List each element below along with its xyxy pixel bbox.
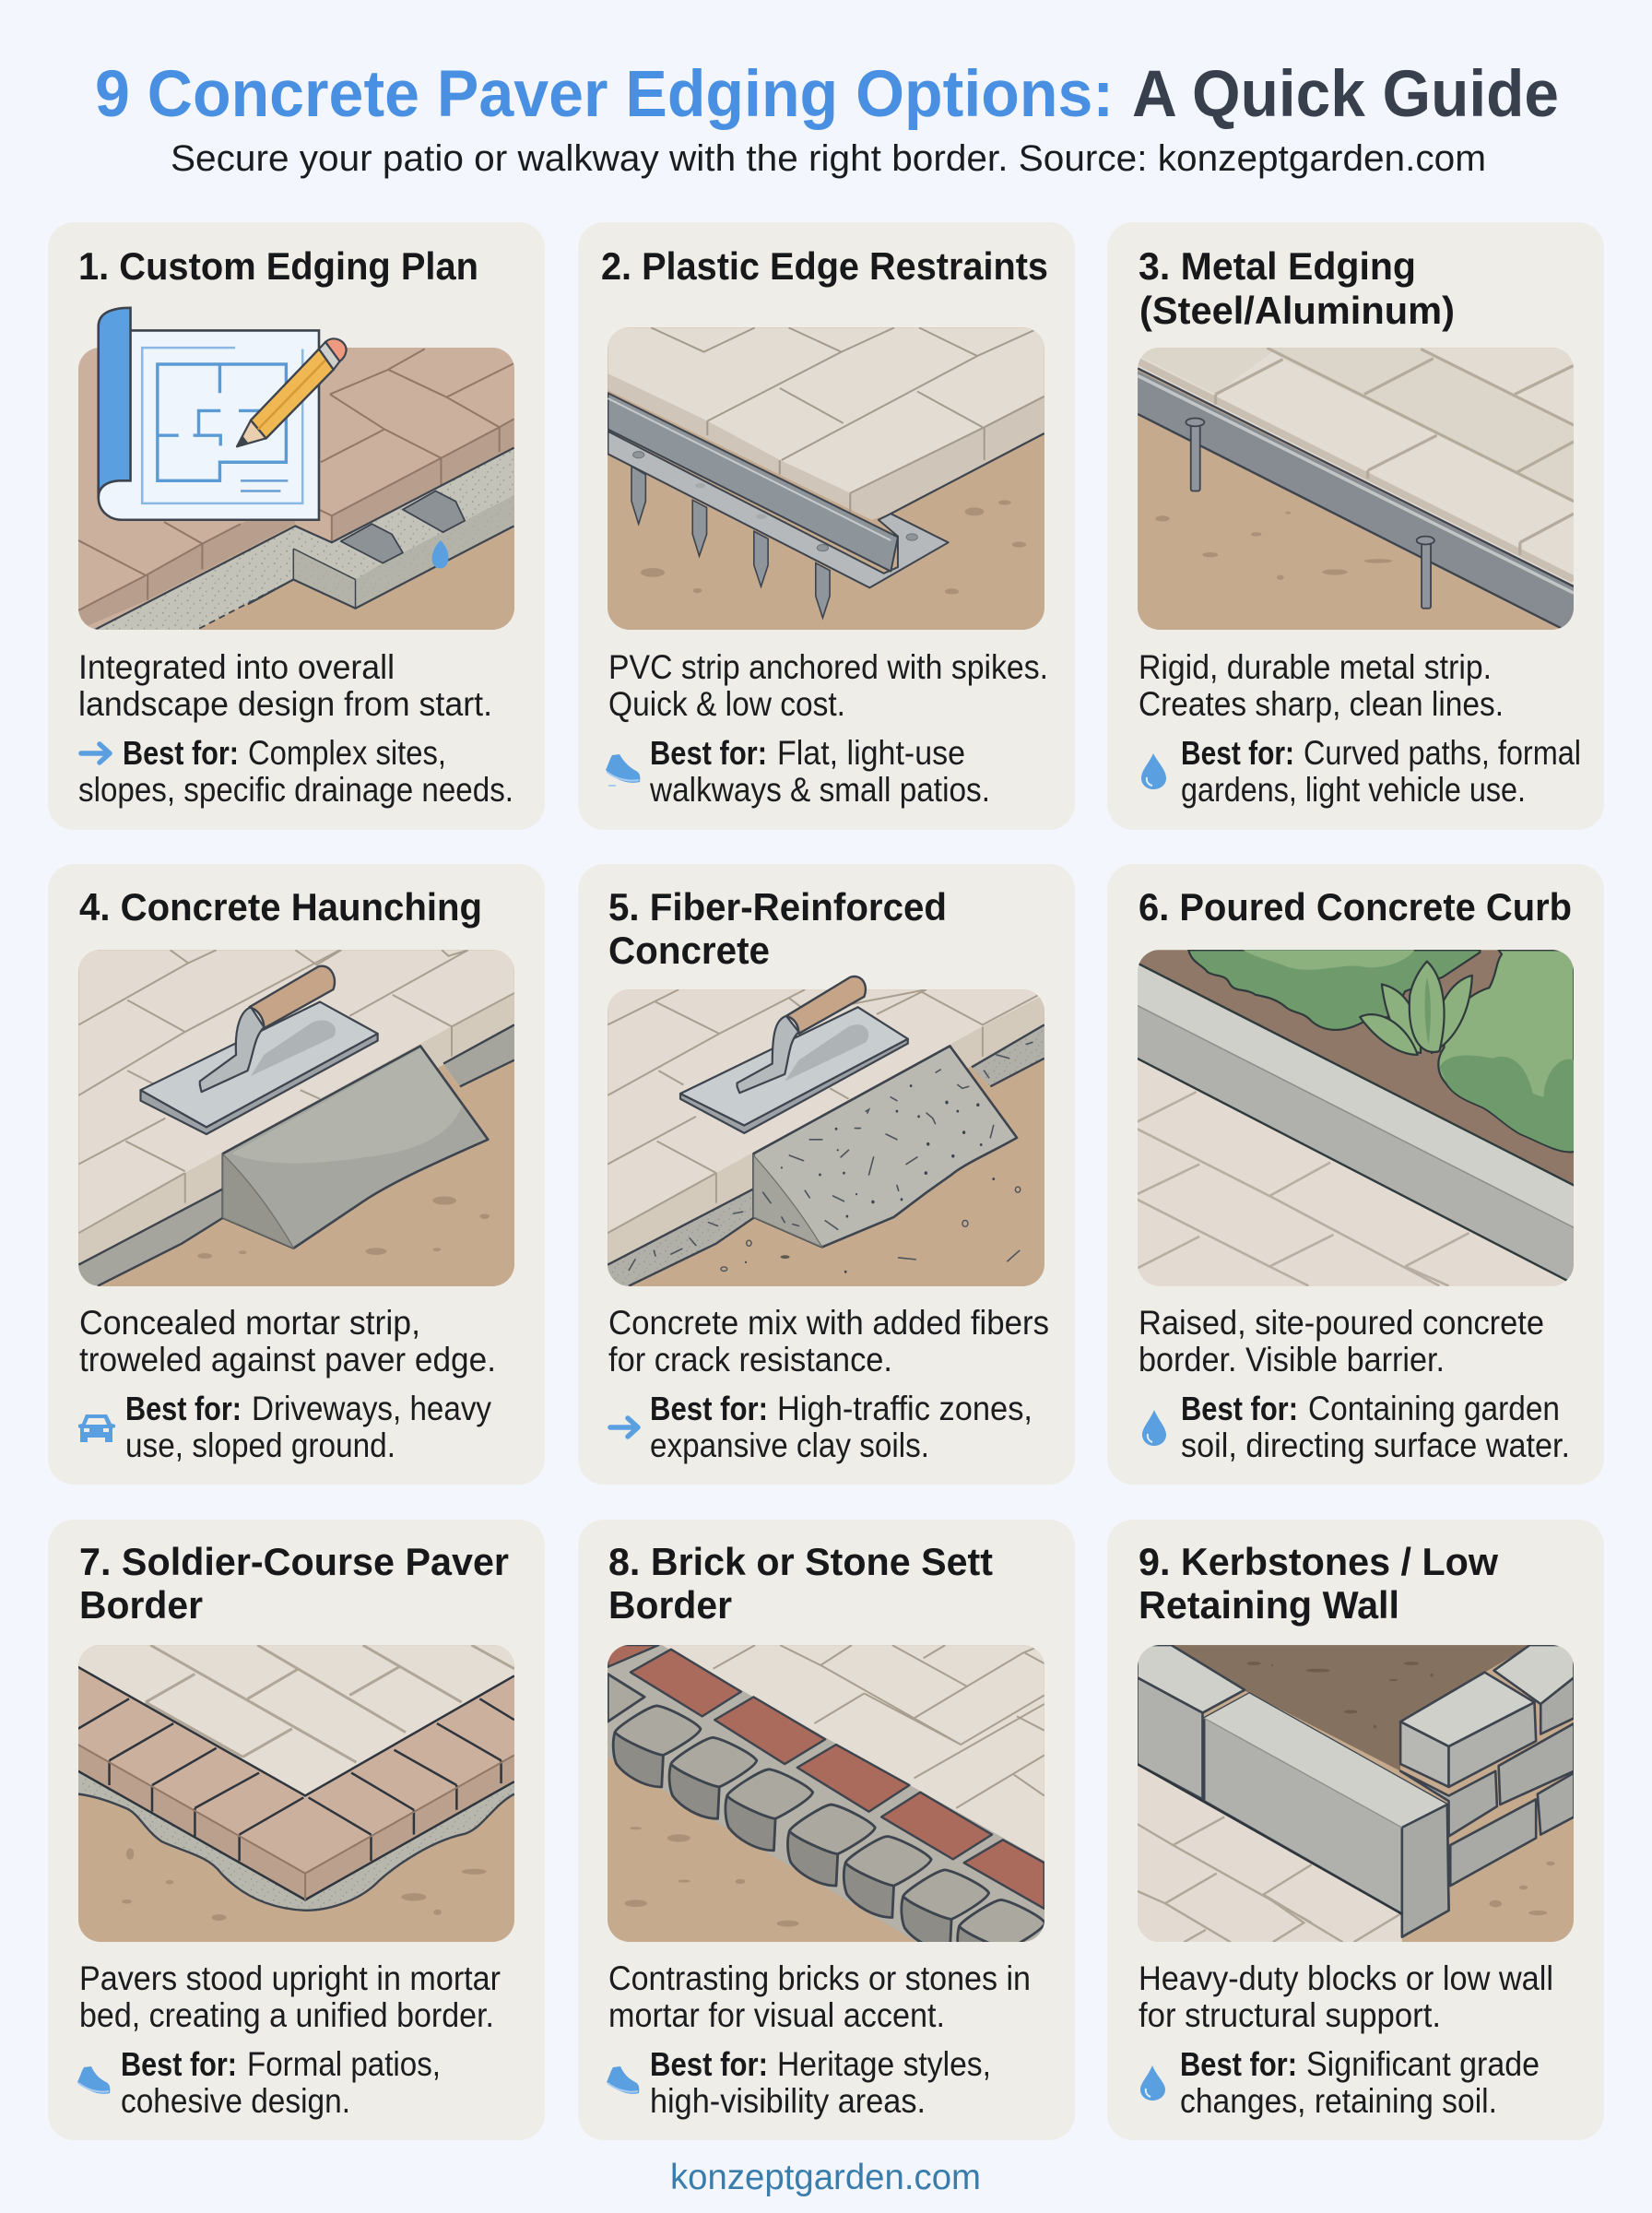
description	[608, 1304, 1049, 1379]
heading: 8. Brick or Stone Sett	[608, 1540, 993, 1583]
heading	[1139, 1540, 1498, 1627]
illustration: paver plan with footing	[73, 343, 521, 635]
heading: Retaining Wall	[1139, 1583, 1399, 1627]
best for: Best for:	[650, 734, 767, 772]
panel: 6 Poured Concrete Curb	[1107, 864, 1604, 1485]
description: Heavy-duty blocks or low wall	[1139, 1959, 1553, 1997]
icon: blueprint and pencil	[99, 308, 347, 520]
heading: 6. Poured Concrete Curb	[1139, 885, 1572, 929]
best for: expansive clay soils.	[650, 1426, 929, 1464]
best for: Significant grade	[1306, 2045, 1540, 2083]
best for	[649, 734, 990, 809]
heading: 7. Soldier-Course Paver	[79, 1540, 509, 1583]
description: border. Visible barrier.	[1139, 1341, 1445, 1379]
best for: use, sloped ground.	[125, 1426, 395, 1464]
illustration: kerbstones and wall	[1134, 1640, 1579, 1947]
description: Pavers stood upright in mortar	[79, 1959, 501, 1997]
description: troweled against paver edge.	[79, 1341, 496, 1379]
icon: shoe	[607, 2066, 639, 2094]
description: Creates sharp, clean lines.	[1139, 685, 1504, 723]
heading: 1. Custom Edging Plan	[78, 244, 478, 288]
panel: 5 Fiber-Reinforced Concrete	[578, 864, 1075, 1485]
best for: slopes, specific drainage needs.	[78, 771, 513, 809]
best for: Complex sites,	[248, 734, 446, 772]
card background	[48, 864, 545, 1485]
best for: Formal patios,	[247, 2045, 441, 2083]
best for: Best for:	[125, 1390, 242, 1427]
card background	[578, 222, 1075, 830]
icon: car	[78, 1414, 115, 1442]
panel: 4 Concrete Haunching	[48, 864, 545, 1485]
best for: changes, retaining soil.	[1180, 2082, 1497, 2120]
best for: Flat, light-use	[777, 734, 965, 772]
illustration: curb with garden bed	[1134, 945, 1579, 1291]
icon: shoe	[77, 2066, 110, 2094]
icon: shoe	[606, 754, 640, 786]
card background	[1107, 1520, 1604, 2140]
panel: 2 Plastic Edge Restraints	[578, 222, 1075, 830]
description	[79, 1304, 496, 1379]
illustration: metal strip with stakes	[1132, 343, 1578, 635]
description: Rigid, durable metal strip.	[1139, 648, 1492, 686]
best for: Heritage styles,	[777, 2045, 991, 2083]
description: Quick & low cost.	[608, 685, 845, 723]
description	[1139, 1959, 1553, 2034]
icon: trowel	[680, 976, 908, 1133]
best for	[125, 1390, 491, 1464]
description: Concealed mortar strip,	[79, 1304, 420, 1342]
description: landscape design from start.	[78, 685, 492, 723]
card background	[578, 1520, 1075, 2140]
heading: 4. Concrete Haunching	[79, 885, 482, 929]
description	[608, 1959, 1031, 2034]
heading: Border	[79, 1583, 203, 1627]
best for: High-traffic zones,	[777, 1390, 1032, 1427]
best for: Best for:	[121, 2045, 237, 2083]
heading: (Steel/Aluminum)	[1139, 289, 1455, 332]
best for: Best for:	[1181, 1390, 1298, 1427]
description: Raised, site-poured concrete	[1139, 1304, 1544, 1342]
best for	[650, 2045, 991, 2120]
heading: Concrete	[608, 929, 770, 972]
best for: soil, directing surface water.	[1181, 1426, 1570, 1464]
heading: Border	[608, 1583, 732, 1627]
icon: arrow	[81, 744, 110, 763]
heading: 2. Plastic Edge Restraints	[601, 244, 1048, 288]
illustration: mortar haunch with trowel	[75, 945, 519, 1291]
best for: gardens, light vehicle use.	[1181, 771, 1526, 809]
icon: water drop	[1140, 2065, 1165, 2101]
best for: walkways & small patios.	[649, 771, 990, 809]
description	[78, 648, 492, 723]
card background	[1107, 864, 1604, 1485]
best for	[650, 1390, 1032, 1464]
title: A Quick Guide	[1132, 58, 1559, 131]
heading: 9. Kerbstones / Low	[1139, 1540, 1498, 1583]
illustration: brick and stone setts	[604, 1640, 1050, 1981]
icon: water drop	[1141, 753, 1166, 789]
best for	[1180, 2045, 1540, 2120]
illustration: soldier course corner	[75, 1640, 519, 1947]
title: 9 Concrete Paver Edging Options:	[95, 58, 1114, 131]
panel: 8 Brick or Stone Sett Border	[578, 1520, 1075, 2140]
card background	[1107, 222, 1604, 830]
heading	[79, 1540, 509, 1627]
best for: Curved paths, formal	[1304, 734, 1581, 772]
best for	[78, 734, 513, 809]
description: mortar for visual accent.	[608, 1996, 945, 2034]
description: Integrated into overall	[78, 648, 395, 686]
best for: high-visibility areas.	[650, 2082, 926, 2120]
description	[1139, 1304, 1544, 1379]
illustration: PVC strip with spikes	[603, 322, 1051, 635]
subtitle: Secure your patio or walkway with the right border. Source: konzeptgarden.com	[171, 138, 1486, 179]
icon: arrow	[610, 1418, 638, 1437]
heading	[608, 1540, 993, 1627]
card background	[48, 222, 545, 830]
description: PVC strip anchored with spikes.	[608, 648, 1048, 686]
best for: Containing garden	[1308, 1390, 1560, 1427]
icon: trowel	[140, 966, 378, 1134]
best for	[1181, 1390, 1570, 1464]
footer source: konzeptgarden.com	[670, 2158, 981, 2197]
card background	[578, 864, 1075, 1485]
best for: Driveways, heavy	[252, 1390, 491, 1427]
heading: 3. Metal Edging	[1139, 244, 1416, 288]
description	[608, 648, 1048, 723]
best for: Best for:	[650, 2045, 768, 2083]
description: for structural support.	[1139, 1996, 1441, 2034]
panel: 1 Custom Edging Plan	[48, 222, 545, 830]
best for: Best for:	[1180, 2045, 1297, 2083]
best for: Best for:	[1181, 734, 1294, 772]
heading	[608, 885, 947, 972]
panel: 3 Metal Edging	[1107, 222, 1604, 830]
description	[1139, 648, 1504, 723]
best for	[1181, 734, 1581, 809]
heading: 5. Fiber-Reinforced	[608, 885, 947, 929]
panel: 7 Soldier-Course Paver Border	[48, 1520, 545, 2140]
description: Contrasting bricks or stones in	[608, 1959, 1031, 1997]
best for: Best for:	[123, 734, 239, 772]
description: bed, creating a unified border.	[79, 1996, 494, 2034]
card background	[48, 1520, 545, 2140]
description: for crack resistance.	[608, 1341, 892, 1379]
best for: Best for:	[650, 1390, 768, 1427]
illustration: fiber concrete haunch	[604, 984, 1050, 1291]
description: Concrete mix with added fibers	[608, 1304, 1049, 1342]
icon: water drop	[1142, 1410, 1166, 1446]
best for	[121, 2045, 441, 2120]
heading	[1139, 244, 1455, 332]
panel: 9 Kerbstones / Low Retaining Wall	[1107, 1520, 1604, 2140]
best for: cohesive design.	[121, 2082, 350, 2120]
description	[79, 1959, 501, 2034]
